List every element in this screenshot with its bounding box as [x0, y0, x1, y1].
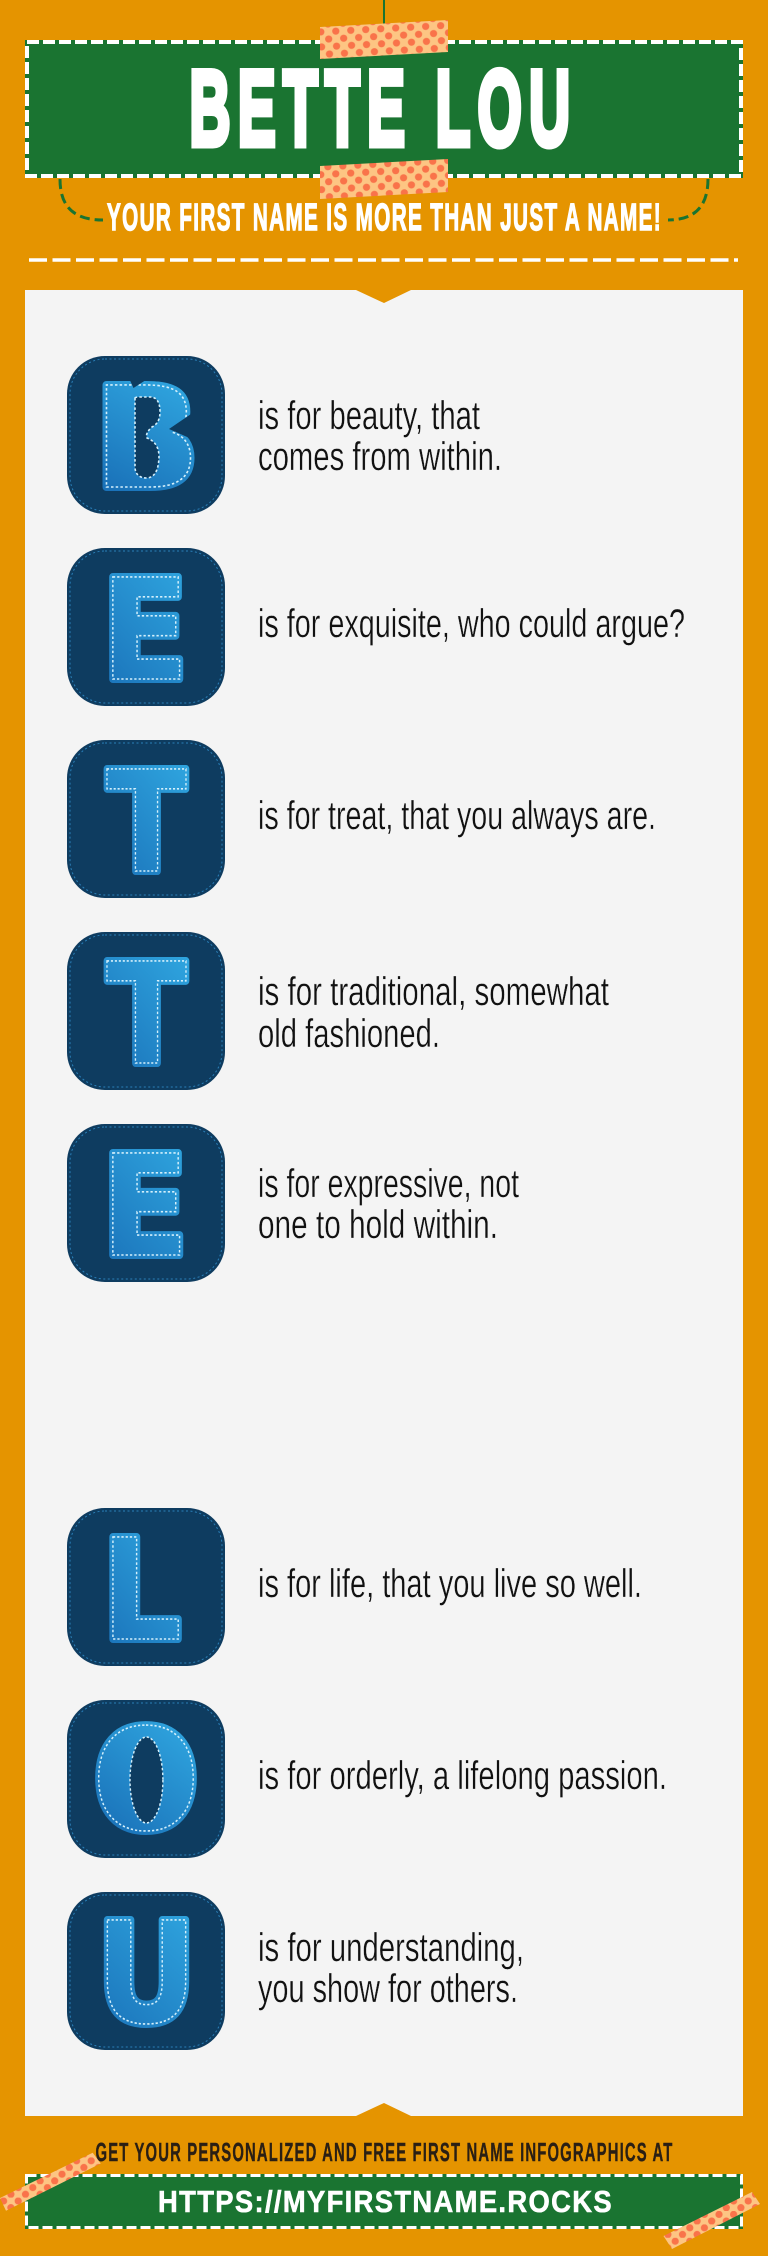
- text: U line: you show for others.: [258, 1967, 518, 2011]
- icon: letter U: [67, 1892, 225, 2056]
- text: T second line: [258, 970, 609, 1056]
- icon: letter L: [67, 1508, 225, 1673]
- panel background: [25, 290, 743, 2116]
- icon: letter T second: T: [106, 934, 187, 1097]
- text: T second line: old fashioned.: [258, 1012, 440, 1056]
- icon: letter O: [67, 1700, 225, 1863]
- icon: letter B: B: [94, 358, 200, 521]
- panel: letters: [25, 290, 743, 2116]
- icon: letter U: U: [96, 1893, 197, 2056]
- text: B line: is for beauty, that: [258, 394, 480, 438]
- URL banner: [25, 2174, 743, 2229]
- tape: bottom: [320, 159, 448, 199]
- hanging thread: [383, 0, 385, 26]
- icon: letter O: O: [92, 1700, 200, 1863]
- tape: footer right: [664, 2192, 760, 2249]
- row: E: [67, 548, 685, 712]
- icon: letter E: E: [101, 549, 189, 712]
- URL text: HTTPS://MYFIRSTNAME.ROCKS: [158, 2185, 613, 2219]
- text: E second line: [258, 1162, 519, 1247]
- tape: top: [320, 20, 448, 59]
- stitched curve: right: [668, 179, 708, 220]
- text: U line: is for understanding,: [258, 1926, 524, 1970]
- text: T second line: is for traditional, somewhat: [258, 970, 609, 1014]
- icon: letter U: U: [96, 1893, 197, 2056]
- icon: letter E second: E: [101, 1125, 189, 1288]
- row: T: [67, 740, 656, 905]
- row: U: [67, 1892, 524, 2056]
- text: B line: comes from within.: [258, 435, 502, 479]
- icon: letter E second: E: [101, 1125, 189, 1288]
- footer: [0, 2137, 760, 2249]
- header: [25, 0, 743, 239]
- row: T second: [67, 932, 609, 1097]
- icon: letter L: L: [101, 1510, 182, 1673]
- row: O: [67, 1700, 667, 1863]
- row: B: [67, 356, 502, 521]
- text: B line: [258, 394, 502, 479]
- icon: letter B: B: [94, 358, 200, 521]
- icon: letter T: T: [106, 742, 187, 905]
- row: E second: [67, 1124, 519, 1288]
- tape: footer left: [0, 2153, 101, 2211]
- icon: letter E: E: [101, 549, 189, 712]
- text: E second line: one to hold within.: [258, 1203, 498, 1247]
- icon: letter E: [67, 548, 225, 712]
- icon: letter T: T: [106, 742, 187, 905]
- icon: letter T second: T: [106, 934, 187, 1097]
- icon: letter E second: [67, 1124, 225, 1288]
- text: E second line: is for expressive, not: [258, 1162, 519, 1206]
- icon: letter O: O: [92, 1700, 200, 1863]
- stitched curve: left: [60, 179, 103, 220]
- title banner: [25, 40, 743, 178]
- text: U line: [258, 1926, 524, 2011]
- icon: letter T second: [67, 932, 225, 1097]
- row: L: [67, 1508, 642, 1673]
- icon: letter B: [67, 356, 225, 521]
- icon: letter T: [67, 740, 225, 905]
- icon: letter L: L: [101, 1510, 182, 1673]
